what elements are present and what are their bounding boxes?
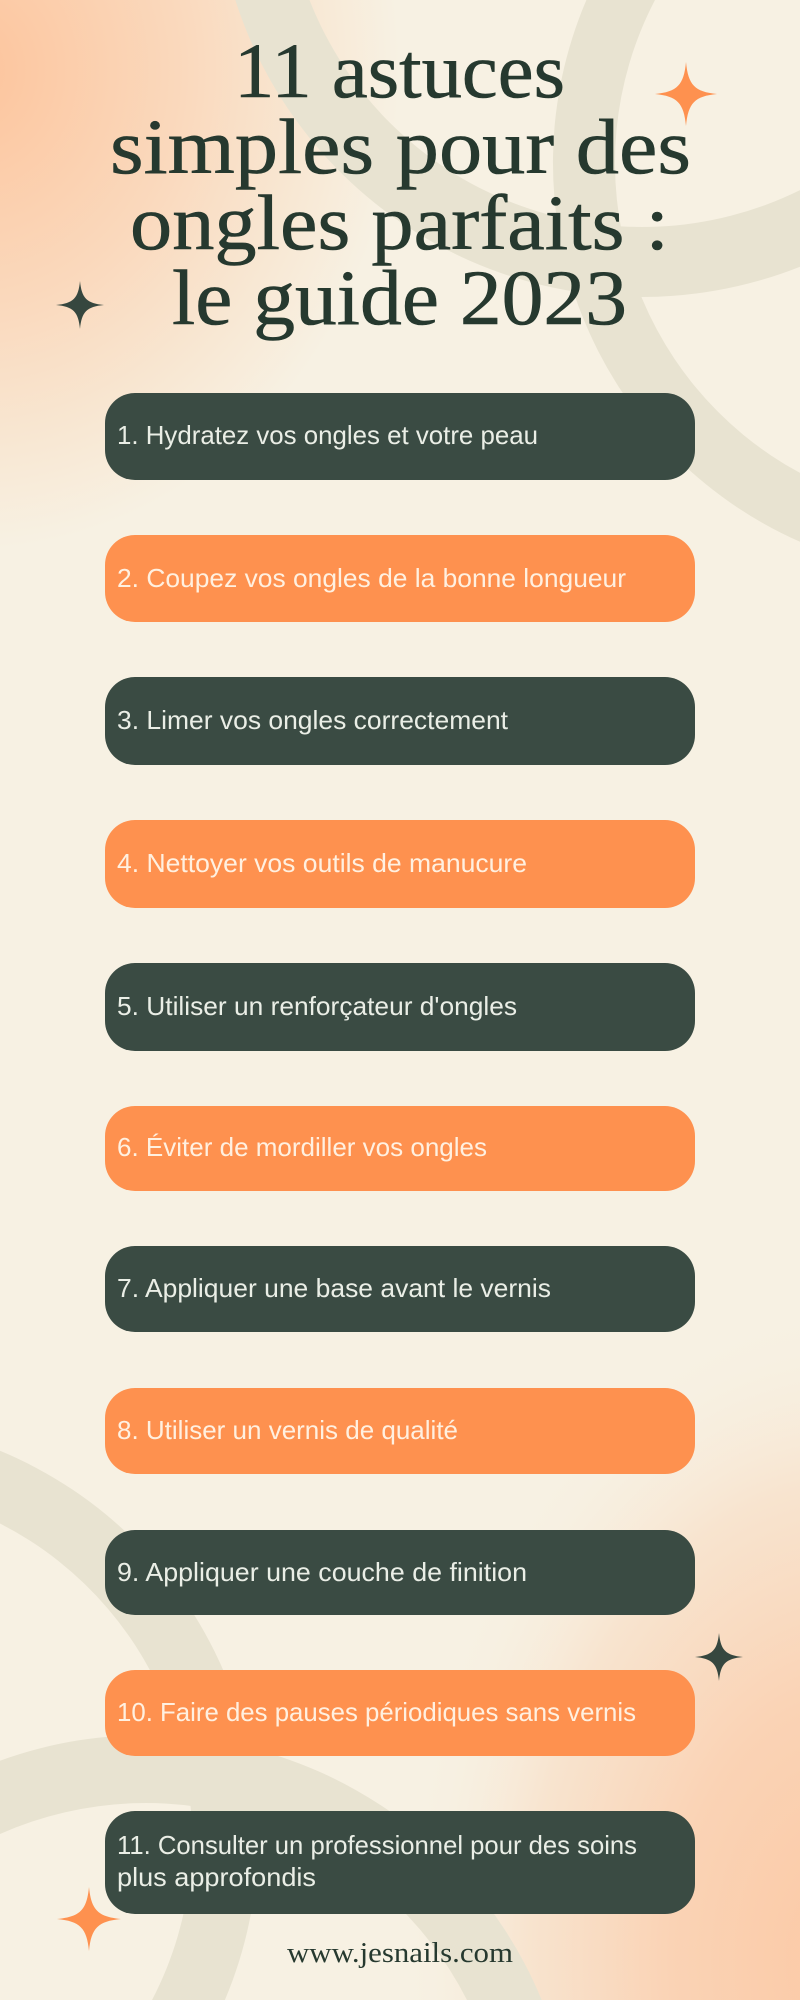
title — [110, 27, 691, 341]
tip 6 — [105, 1106, 695, 1191]
tip 1 — [105, 393, 695, 480]
tip 8 — [105, 1388, 695, 1474]
tip 8: 8. Utiliser un vernis de qualité — [117, 1415, 458, 1445]
tip 5 — [105, 963, 695, 1051]
tip 9 — [105, 1530, 695, 1615]
tip 4: 4. Nettoyer vos outils de manucure — [117, 848, 527, 878]
tip 3: 3. Limer vos ongles correctement — [117, 705, 509, 735]
icon: dark sparkle right — [695, 1633, 743, 1681]
tip 3 — [105, 677, 695, 765]
tip 10 — [105, 1670, 695, 1756]
tip 4 — [105, 820, 695, 908]
title: le guide 2023 — [172, 254, 627, 341]
title: 11 astuces — [234, 27, 565, 114]
icon: dark sparkle top left — [56, 281, 104, 329]
icon: orange sparkle bottom left — [57, 1887, 121, 1951]
tip 11: 11. Consulter un professionnel pour des soins — [117, 1830, 637, 1860]
tip 9: 9. Appliquer une couche de finition — [117, 1557, 527, 1587]
tip 5: 5. Utiliser un renforçateur d'ongles — [117, 991, 517, 1021]
tip 2: 2. Coupez vos ongles de la bonne longueur — [117, 563, 626, 593]
tip 11: plus approfondis — [117, 1862, 316, 1892]
tip 2 — [105, 535, 695, 622]
tip 1: 1. Hydratez vos ongles et votre peau — [117, 420, 538, 450]
tip 11 — [105, 1811, 695, 1914]
tip 7: 7. Appliquer une base avant le vernis — [117, 1273, 551, 1303]
tip 10: 10. Faire des pauses périodiques sans vernis — [117, 1697, 636, 1727]
title: simples pour des — [110, 103, 691, 190]
tip 7 — [105, 1246, 695, 1332]
footer website: www.jesnails.com — [287, 1937, 513, 1969]
icon: orange sparkle top right — [655, 62, 717, 126]
title: ongles parfaits : — [130, 179, 669, 266]
tip 6: 6. Éviter de mordiller vos ongles — [117, 1132, 487, 1162]
